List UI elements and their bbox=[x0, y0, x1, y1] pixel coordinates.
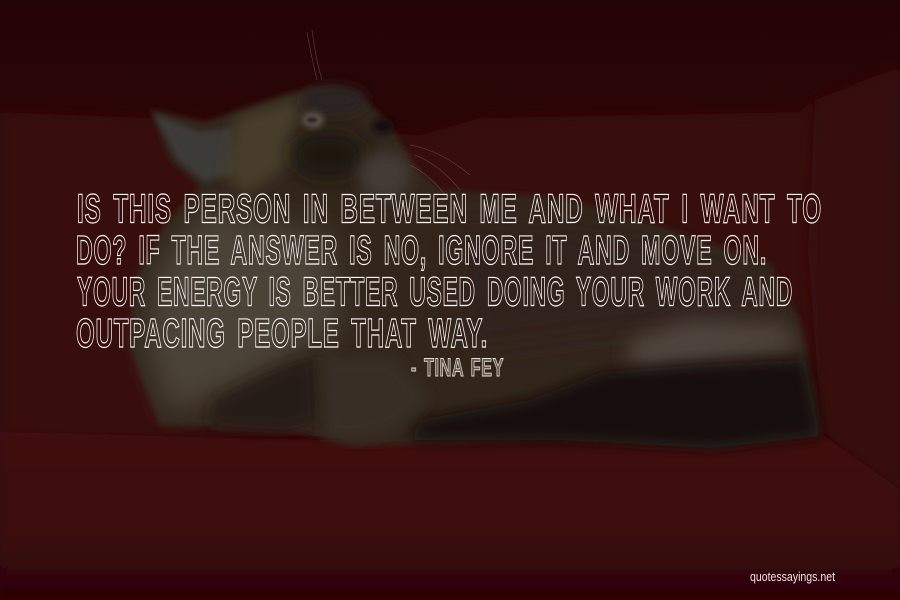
cat paw right bbox=[322, 358, 430, 440]
seat bbox=[0, 432, 900, 600]
watermark: quotessayings.net bbox=[750, 569, 835, 584]
cat bbox=[129, 30, 822, 450]
cat dark face mask bbox=[290, 131, 366, 179]
right cushion bbox=[808, 66, 900, 500]
cat body bbox=[129, 86, 822, 450]
whiskers bbox=[307, 30, 470, 195]
cat ear bbox=[154, 114, 236, 182]
cat white flank bbox=[630, 320, 795, 370]
quote text bbox=[76, 186, 822, 356]
quote text: OUTPACING PEOPLE THAT WAY. bbox=[76, 310, 488, 356]
cat dark tail bbox=[410, 360, 820, 448]
attribution: - TINA FEY bbox=[411, 354, 504, 382]
cat nose bbox=[372, 118, 394, 134]
cat eye bbox=[302, 112, 324, 128]
cat cheek bbox=[225, 98, 300, 195]
cat paw left bbox=[210, 355, 318, 430]
cat chest highlights bbox=[145, 210, 340, 415]
cat back fur bbox=[450, 215, 780, 350]
back cushion bbox=[0, 90, 820, 440]
